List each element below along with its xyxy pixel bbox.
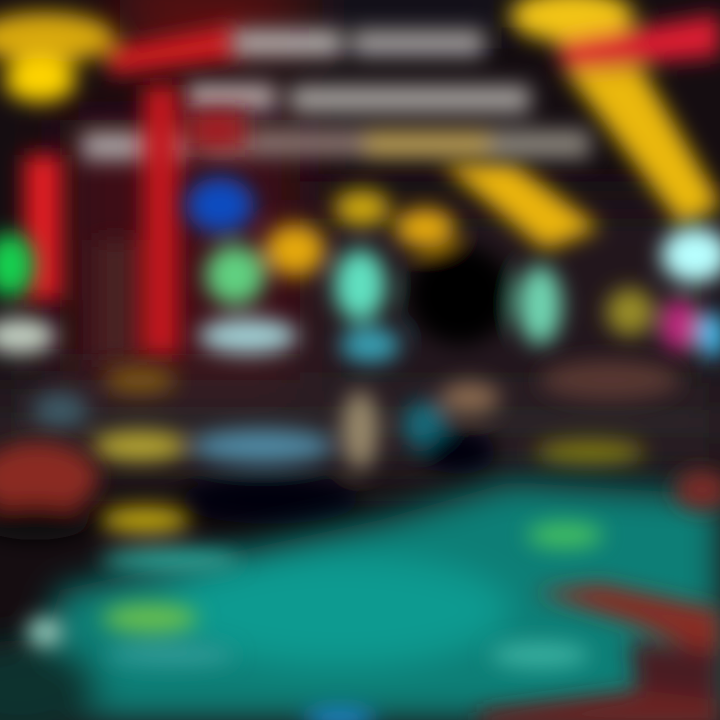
title block (illegible) (82, 30, 590, 160)
table markings (27, 507, 603, 720)
slot machine screens (0, 177, 720, 363)
ceiling lamps and beams (0, 0, 720, 250)
middle gaming floor (32, 360, 680, 524)
red columns (24, 85, 245, 360)
teal table (0, 482, 720, 720)
background glow areas (0, 0, 720, 470)
hands (0, 442, 720, 720)
